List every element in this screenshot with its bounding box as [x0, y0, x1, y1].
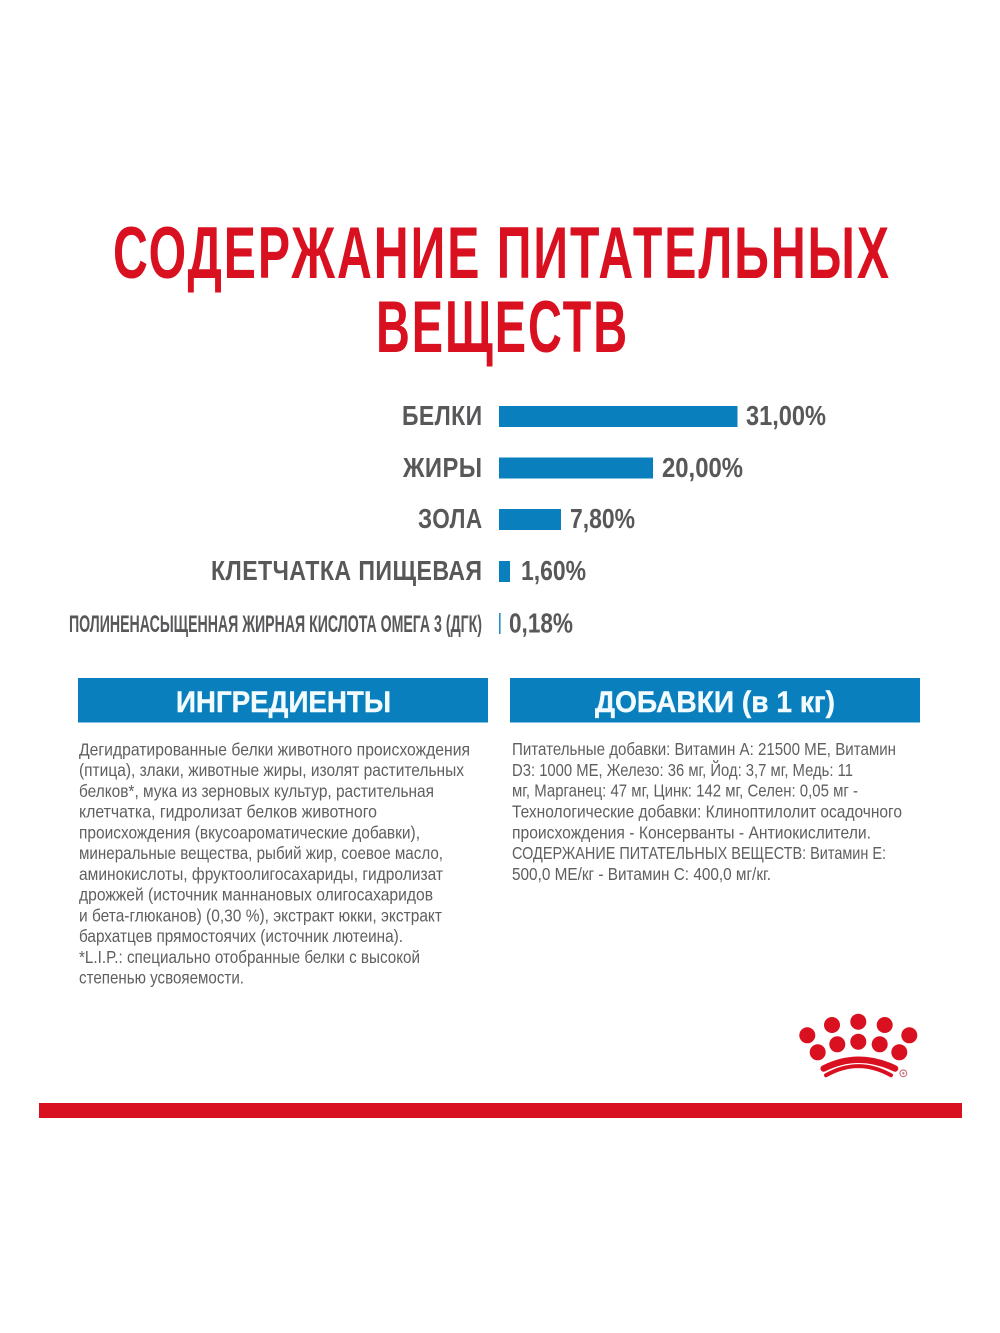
- text block: additives list: мг, Марганец: 47 мг, Цинк: 142 мг, Селен: 0,05 мг -: [512, 781, 858, 801]
- heading: additives: ДОБАВКИ (в 1 кг): [595, 686, 835, 719]
- row: protein: [402, 400, 826, 431]
- panel: ingredients: [78, 678, 488, 988]
- text block: additives list: СОДЕРЖАНИЕ ПИТАТЕЛЬНЫХ ВЕЩЕСТВ: Витамин Е:: [512, 843, 886, 863]
- text block: additives list: Питательные добавки: Витамин А: 21500 МЕ, Витамин: [512, 739, 896, 759]
- row: protein: 31,00%: [746, 400, 826, 431]
- text block: additives list: [512, 739, 902, 884]
- text block: ingredients list: бархатцев прямостоячих (источник лютеина).: [79, 926, 403, 946]
- text block: additives list: 500,0 МЕ/кг - Витамин С: 400,0 мг/кг.: [512, 864, 771, 884]
- heading: additives: [510, 678, 920, 722]
- text block: ingredients list: минеральные вещества, рыбий жир, соевое масло,: [79, 843, 443, 863]
- text block: ingredients list: клетчатка, гидролизат белков животного: [79, 802, 377, 822]
- text block: additives list: Технологические добавки: Клиноптилолит осадочного: [512, 802, 902, 822]
- text block: additives list: происхождения - Консерванты - Антиокислители.: [512, 822, 871, 842]
- panel: additives: [510, 678, 920, 884]
- row: fibre: КЛЕТЧАТКА ПИЩЕВАЯ: [211, 555, 482, 586]
- row: ash: ЗОЛА: [418, 503, 482, 534]
- heading: ingredients: [78, 678, 488, 722]
- row: fat: [402, 452, 743, 483]
- text block: ingredients list: дрожжей (источник маннановых олигосахаридов: [79, 885, 433, 905]
- row: ash: [418, 503, 635, 534]
- text block: ingredients list: происхождения (вкусоароматические добавки),: [79, 822, 420, 842]
- text block: ingredients list: степенью усвояемости.: [79, 968, 244, 988]
- text block: additives list: D3: 1000 МЕ, Железо: 36 мг, Йод: 3,7 мг, Медь: 11: [512, 759, 853, 780]
- row: protein: БЕЛКИ: [402, 400, 482, 431]
- text block: ingredients list: белков*, мука из зерновых культур, растительная: [79, 781, 434, 801]
- text block: ingredients list: аминокислоты, фруктоолигосахариды, гидролизат: [79, 864, 443, 884]
- row: fat: ЖИРЫ: [402, 452, 482, 483]
- text block: ingredients list: *L.I.P.: специально отобранные белки с высокой: [79, 947, 420, 967]
- footer red bar: [39, 1103, 962, 1118]
- row: omega 3: ПОЛИНЕНАСЫЩЕННАЯ ЖИРНАЯ КИСЛОТА ОМЕГА 3 (ДГК): [69, 611, 482, 638]
- row: omega 3: 0,18%: [509, 608, 573, 638]
- title: [113, 213, 891, 368]
- text block: ingredients list: [79, 740, 470, 988]
- text block: ingredients list: Дегидратированные белки животного происхождения: [79, 740, 470, 760]
- title: ВЕЩЕСТВ: [376, 287, 629, 368]
- row: fibre: 1,60%: [521, 555, 586, 586]
- row: fat: 20,00%: [662, 452, 743, 483]
- row: omega 3: [69, 608, 573, 638]
- heading: ingredients: ИНГРЕДИЕНТЫ: [176, 686, 391, 719]
- row: ash: 7,80%: [570, 503, 635, 534]
- bar chart: nutrient content: [69, 400, 826, 638]
- text block: ingredients list: и бета-глюканов) (0,30 %), экстракт юкки, экстракт: [79, 905, 442, 925]
- icon: royal canin crown logo: [799, 1014, 917, 1077]
- text block: ingredients list: (птица), злаки, животные жиры, изолят растительных: [79, 760, 464, 780]
